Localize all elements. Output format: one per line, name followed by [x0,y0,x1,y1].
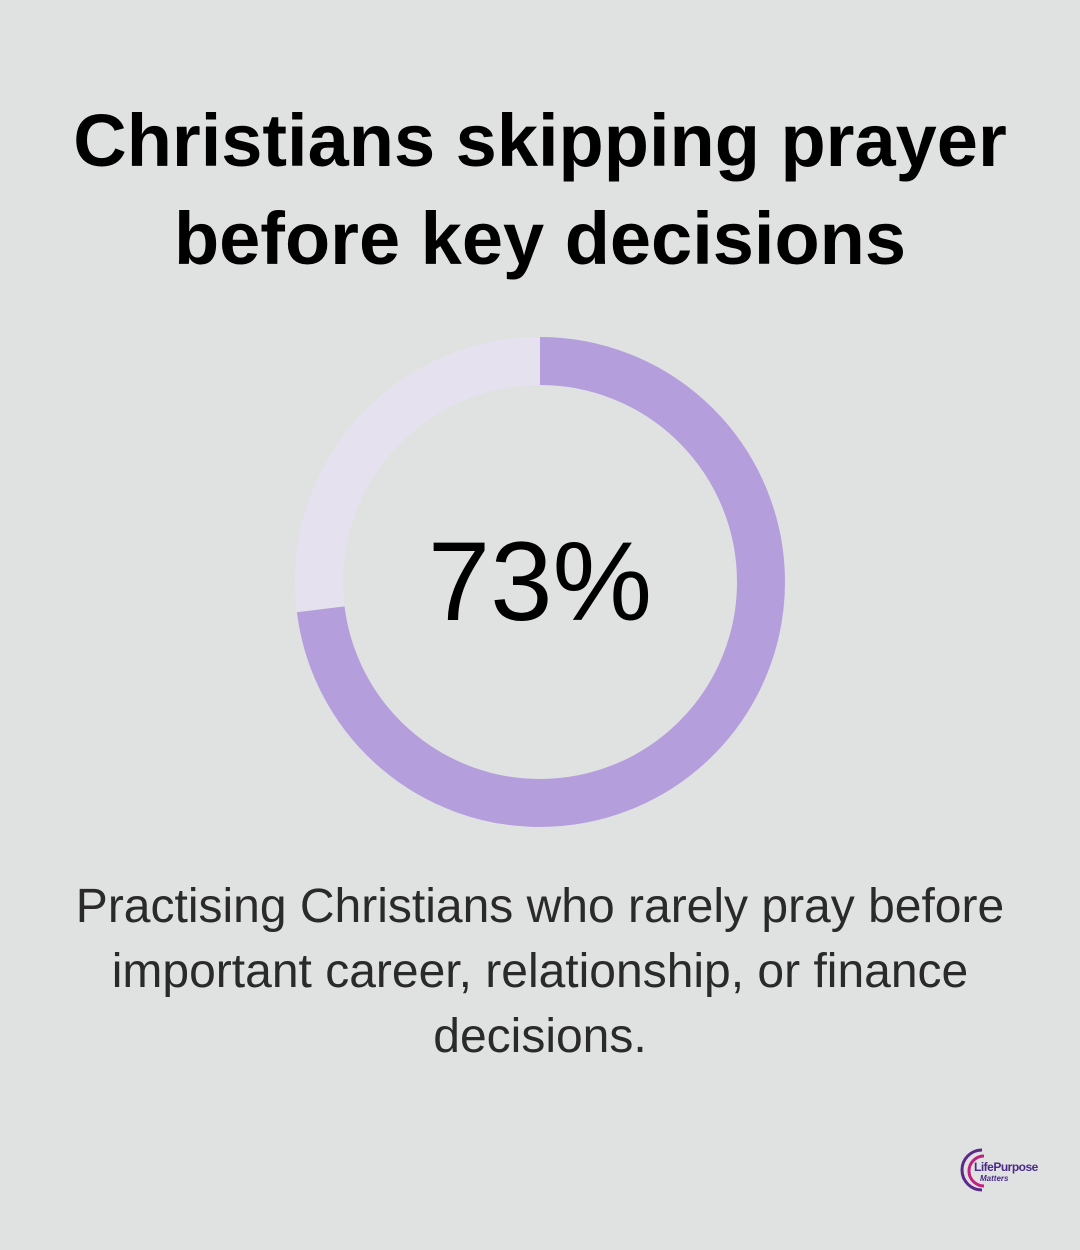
description text: decisions. [433,1010,647,1063]
title [73,99,1007,280]
donut track [319,361,761,803]
percentage label: 73% [428,519,652,644]
logo: Matters [980,1174,1008,1183]
description text: important career, relationship, or finance [112,945,968,998]
description text [76,880,1004,1063]
logo [960,1148,1038,1192]
title: Christians skipping prayer [73,99,1007,182]
logo: LifePurpose [974,1160,1038,1174]
description text: Practising Christians who rarely pray before [76,880,1004,933]
title: before key decisions [174,197,906,280]
donut value arc 73% [319,361,761,803]
